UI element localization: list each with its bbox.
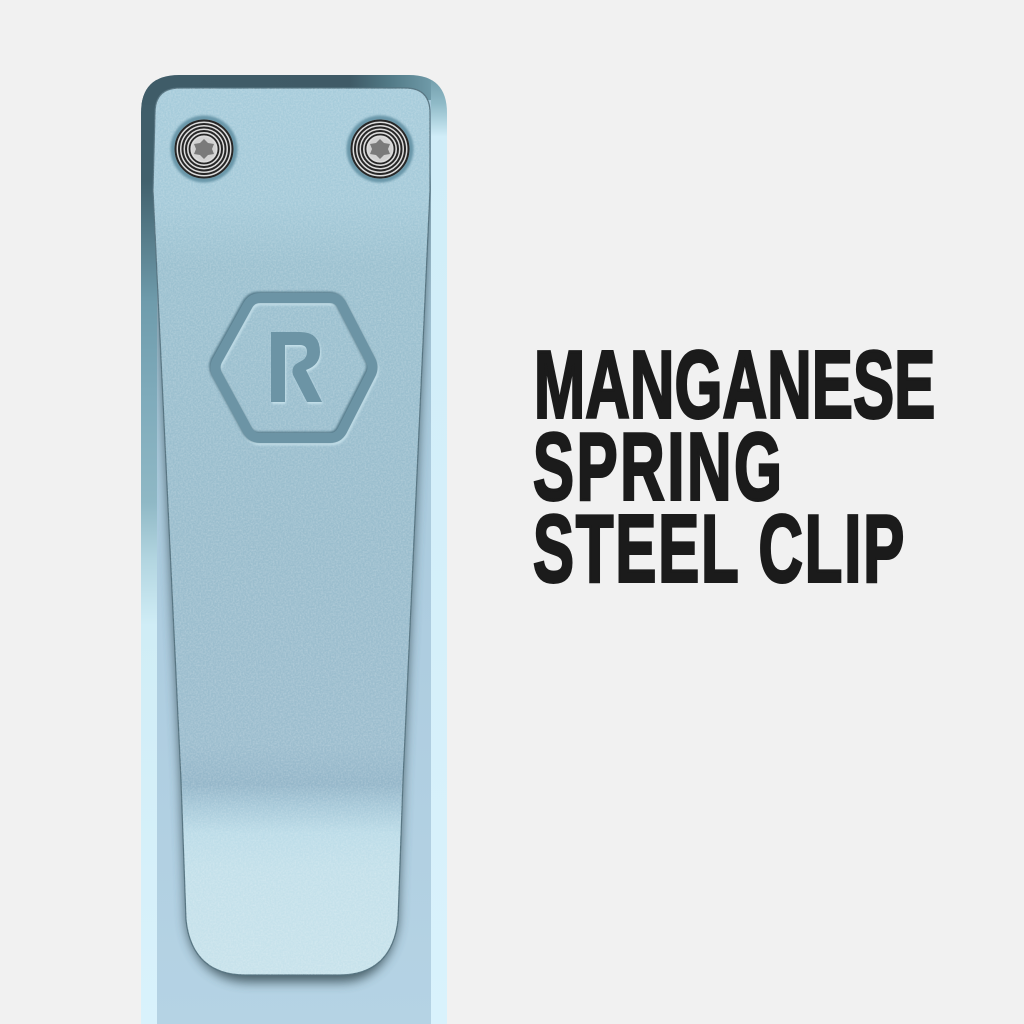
clip grain texture [153,88,430,975]
hexagon ring [216,298,372,438]
heading line 3: STEEL CLIP [533,496,904,603]
pocket clip [153,88,430,975]
body top bevel [141,75,431,105]
clip shadow [153,180,430,982]
heading line 1: MANGANESE [534,332,935,439]
left screw [170,116,238,182]
heading [533,332,935,603]
R letter highlight [272,334,323,404]
embossed R hexagon logo [214,297,374,440]
right screw [346,116,414,182]
body right bevel [431,75,447,1024]
infographic canvas [141,75,934,1024]
body left bevel [141,75,157,1024]
hexagon highlight [216,300,374,440]
clip plate [153,88,430,975]
heading line 2: SPRING [533,414,782,521]
hexagon shade [214,297,372,437]
tool body [141,75,447,1024]
R letter [271,332,322,402]
body inner face [157,100,431,1024]
